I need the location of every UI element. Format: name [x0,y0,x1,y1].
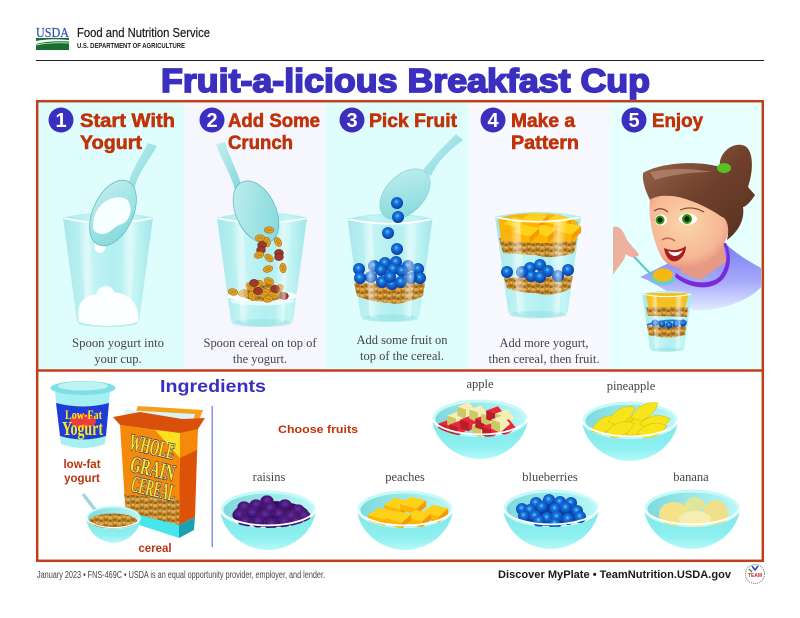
label: low-fat yogurt: low-fat [63,459,101,471]
label: low-fat yogurt: yogurt [64,473,100,485]
agency name: U.S. DEPARTMENT OF AGRICULTURE [77,41,185,50]
caption step 4: then cereal, then fruit. [488,352,600,366]
caption step 2 [204,336,317,366]
step number 3 [340,108,364,132]
bowl: blueberries: blueberries [522,470,578,484]
bowl of cereal [83,494,141,543]
bowl: pineapple [582,379,678,461]
spoon with yogurt [80,143,157,253]
caption step 2: the yogurt. [233,352,287,366]
small parfait glass [642,291,692,352]
icon: team nutrition badge: TEAM [748,573,762,579]
caption step 4: Add more yogurt, [500,336,588,350]
spoon with falling cereal [216,142,288,273]
cereal box: CEREAL [129,472,178,506]
heading: start with yogurt: Start With [80,111,175,132]
footer: legal note: January 2023 • FNS-469C • USDA is an equal opportunity provider, employer, and lender. [37,570,325,581]
heading: make a pattern: Make a [511,111,575,132]
heading: make a pattern: Pattern [511,133,579,154]
bowl: apple [432,377,528,459]
heading: add some crunch: Crunch [228,133,293,154]
heading: start with yogurt: Yogurt [80,133,143,154]
heading: add some crunch: Add Some [228,111,320,132]
panel: step 2 [184,102,326,370]
bowl: banana [644,470,740,549]
heading: add some crunch [228,111,320,154]
bowl: blueberries [503,470,599,549]
icon: team nutrition badge [746,564,764,584]
bowl: pineapple: pineapple [607,379,656,393]
caption step 2: Spoon cereal on top of [204,336,317,350]
caption step 4 [488,336,600,366]
yogurt cup [50,381,116,448]
glass with layered parfait [495,212,581,318]
ingredients panel [50,376,740,555]
glass with yogurt [63,212,153,327]
caption step 1: your cup. [94,352,142,366]
footer: website: Discover MyPlate • TeamNutrition.USDA.gov [498,569,732,581]
step number 2: 2 [206,110,218,132]
girl eating [613,145,761,310]
caption step 1: Spoon yogurt into [72,336,164,350]
bowl: banana: banana [673,470,709,484]
cereal box: GRAIN [128,452,178,486]
cereal box [113,406,205,538]
panel: step 4 [468,102,610,370]
USDA logo [36,26,70,50]
label: low-fat yogurt [63,459,101,485]
heading: make a pattern [511,111,579,154]
caption step 3: Add some fruit on [356,333,448,347]
step number 5: 5 [628,110,640,132]
bowl: raisins [220,470,316,550]
step number 1: 1 [55,110,67,132]
panel: step 1 [38,102,184,370]
label: choose fruits: Choose fruits [278,424,358,436]
label: cereal: cereal [138,543,172,555]
cereal box: WHOLE [127,430,177,464]
agency name [77,26,210,50]
step number 4: 4 [487,110,499,132]
heading: start with yogurt [80,111,175,154]
yogurt cup: Yogurt [62,418,103,440]
glass with fruit [347,214,433,322]
USDA logo: USDA [36,26,70,41]
bowl: peaches: peaches [385,470,425,484]
spoon with blueberries [370,134,463,255]
caption step 1 [72,336,164,366]
bowl: peaches [357,470,453,550]
agency name: Food and Nutrition Service [77,26,210,40]
glass with cereal [217,212,307,327]
heading: enjoy: Enjoy [652,111,703,132]
title: Fruit-a-licious Breakfast Cup [161,62,650,99]
hand and spoon [613,227,675,285]
step number 3: 3 [346,110,358,132]
step number 1 [48,108,74,132]
bowl: apple: apple [466,377,494,391]
caption step 3 [356,333,448,363]
panel: step 5 [610,102,762,370]
bowl: raisins: raisins [253,470,285,484]
heading: ingredients: Ingredients [160,376,266,396]
heading: pick fruit: Pick Fruit [369,111,458,132]
panel border [37,101,763,561]
step number 2 [200,108,224,132]
yogurt cup: Low-Fat [65,407,103,422]
step number 4 [480,108,506,132]
caption step 3: top of the cereal. [360,349,444,363]
panel: step 3 [326,102,468,370]
step number 5 [622,108,646,132]
